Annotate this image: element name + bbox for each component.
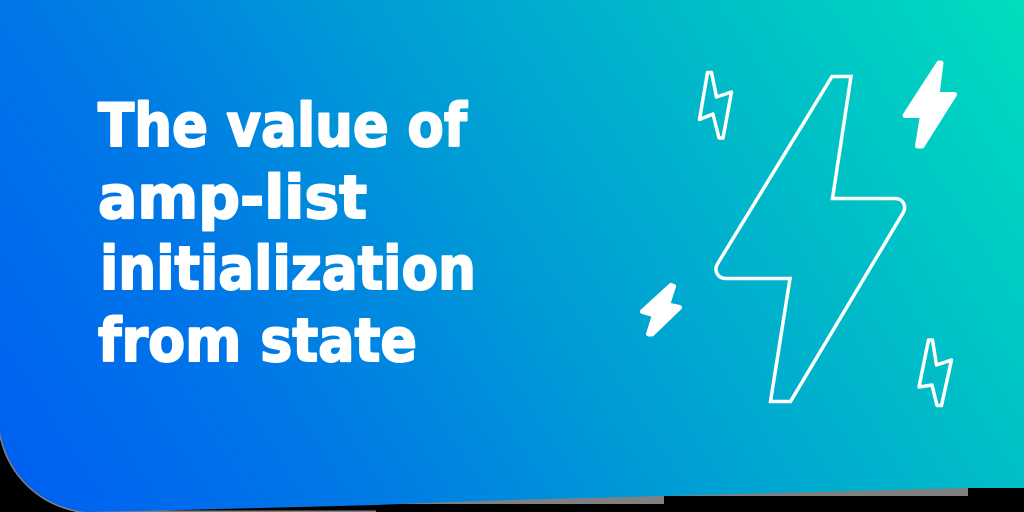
icon: small outlined bolt bottom right xyxy=(919,340,952,406)
title: from state xyxy=(98,306,417,376)
title: The value of xyxy=(98,91,468,161)
icon: solid bolt lower left xyxy=(642,286,680,334)
title: amp-list xyxy=(98,163,367,233)
title xyxy=(98,91,476,376)
icon: solid bolt top right xyxy=(905,63,954,146)
icon: large outlined lightning bolt xyxy=(716,76,905,402)
icon: small outlined bolt top left xyxy=(700,72,732,138)
title: initialization xyxy=(100,234,476,304)
